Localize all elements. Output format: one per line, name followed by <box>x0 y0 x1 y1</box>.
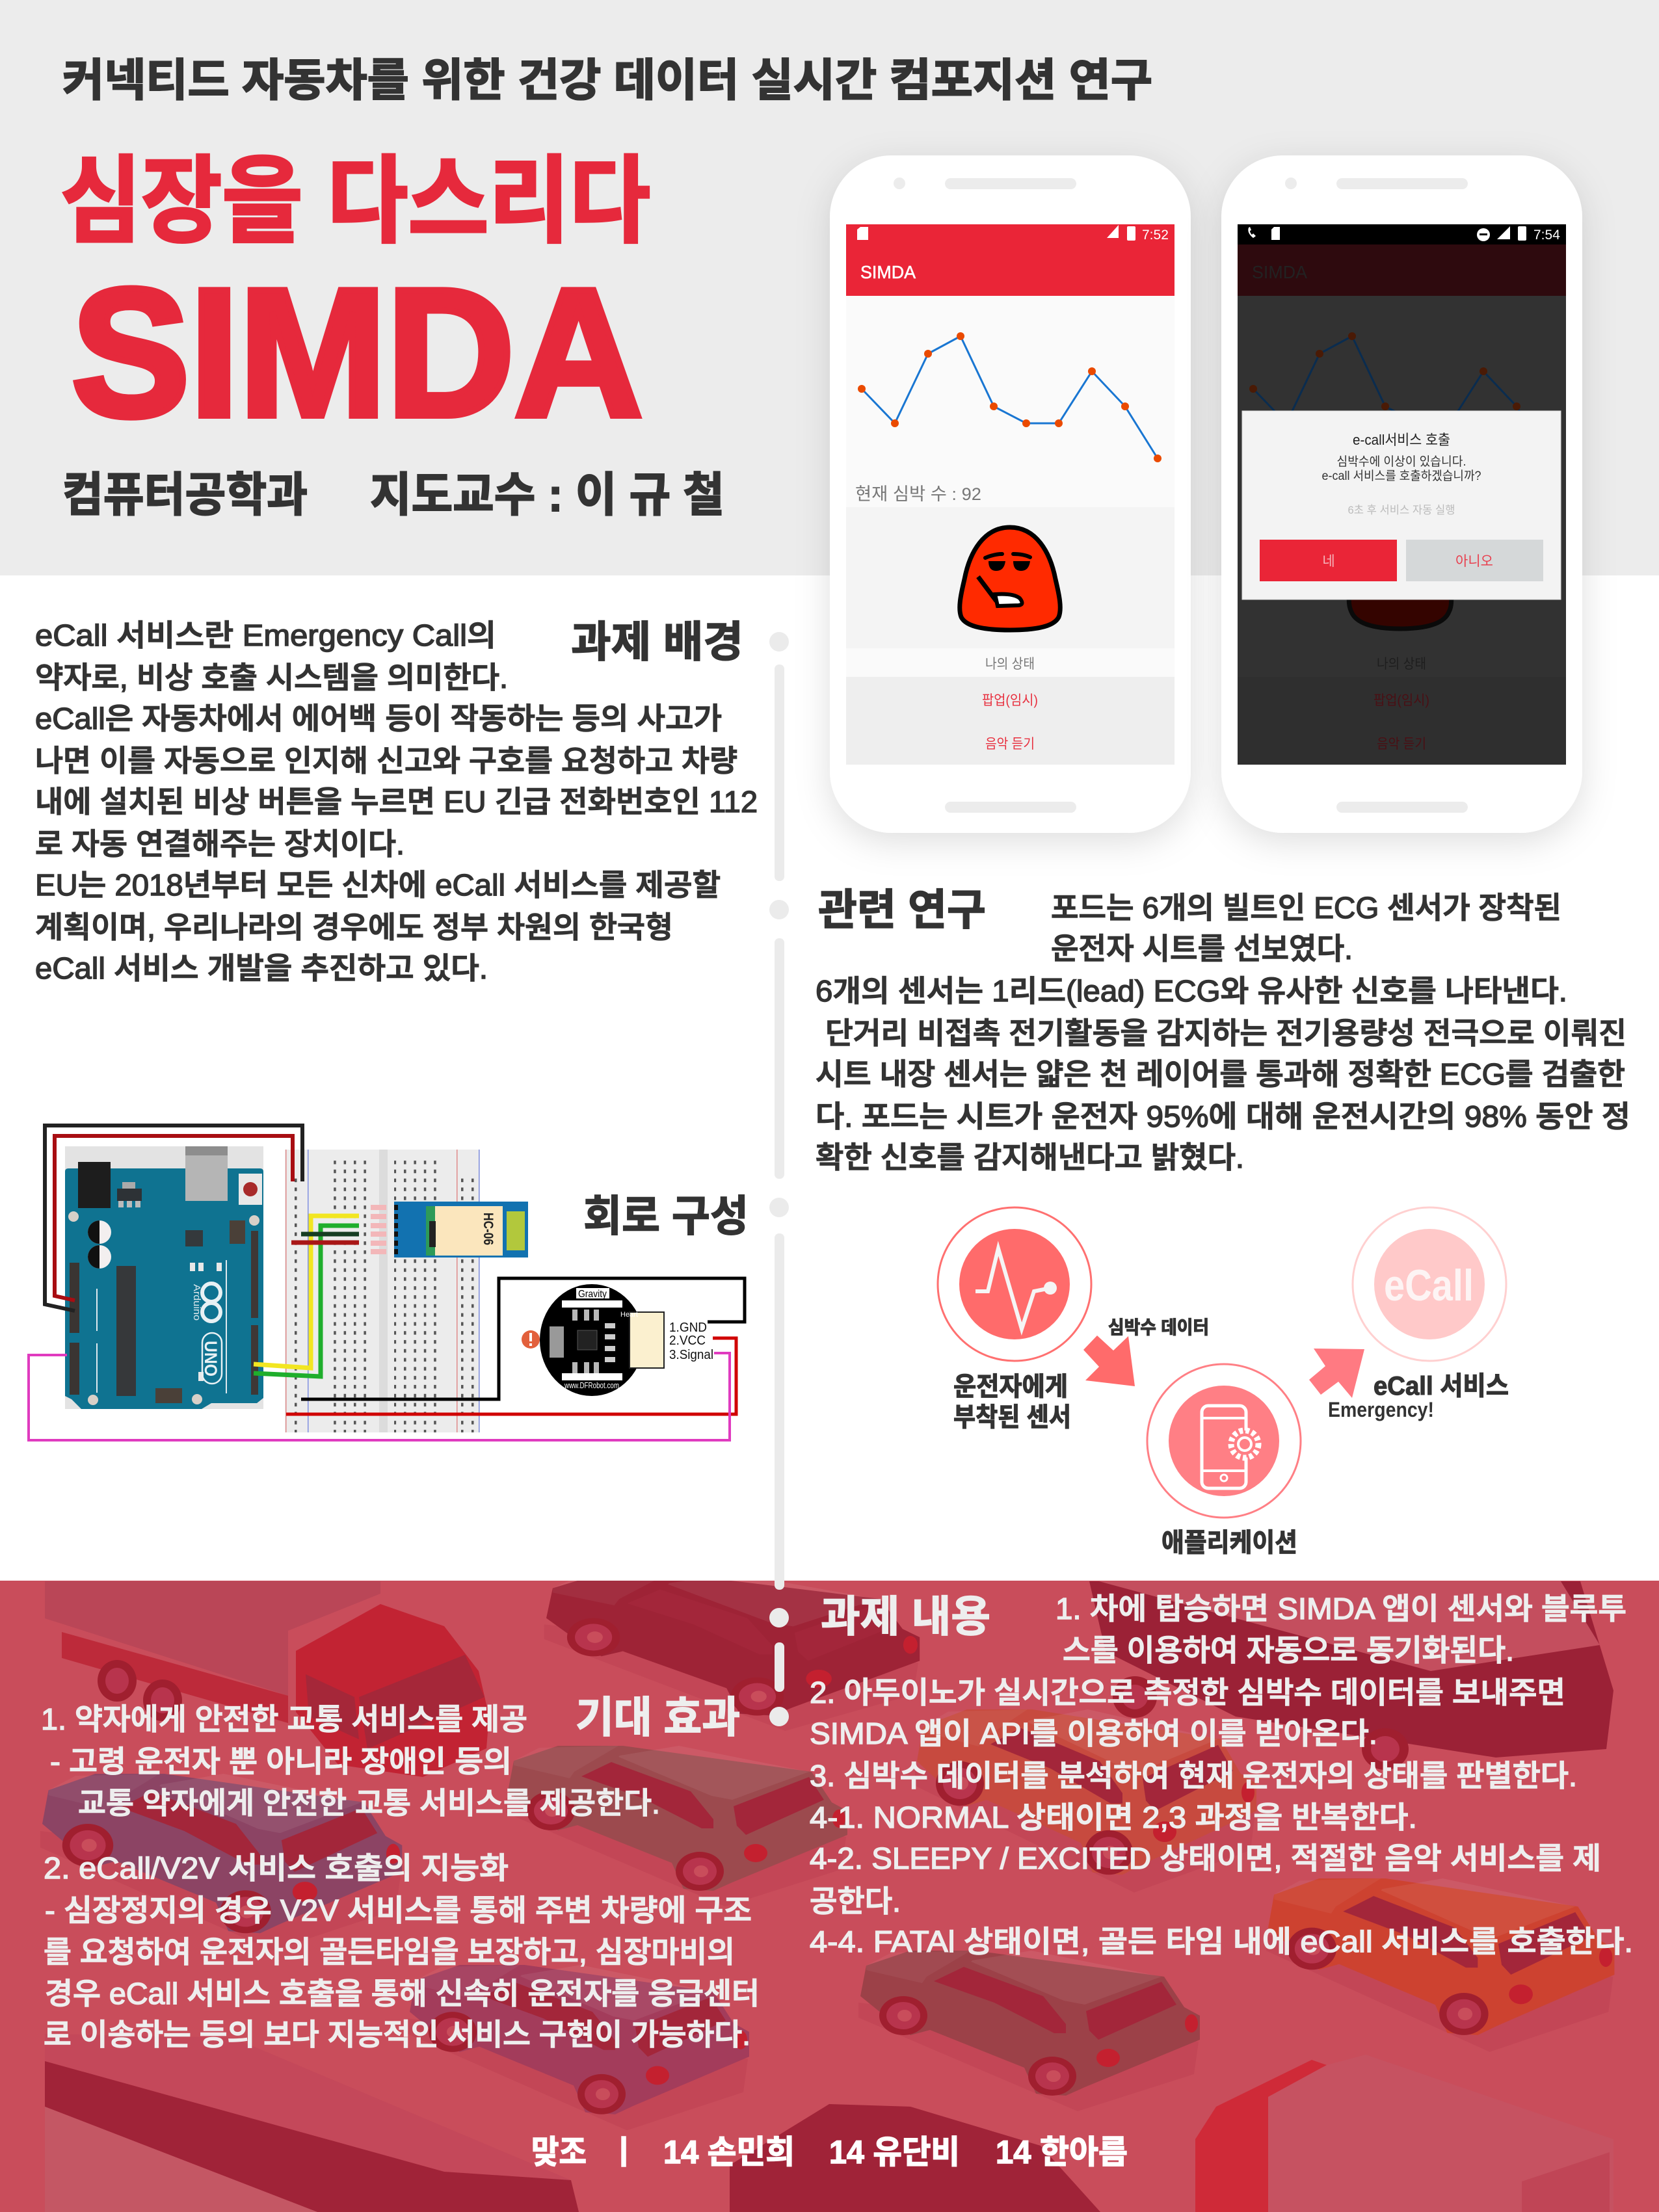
heading: 과제 내용 <box>821 1592 990 1640</box>
arduino: UNO <box>201 1341 220 1376</box>
HC-06 module <box>371 1202 528 1257</box>
dim labels: 나의 상태 <box>1377 657 1426 672</box>
list: 스를 이용하여 자동으로 동기화된다. <box>1063 1633 1514 1667</box>
application node <box>1147 1364 1301 1557</box>
header background <box>0 0 1659 575</box>
heart rate label: 현재 심박 수 : 92 <box>855 484 981 504</box>
dim labels <box>1374 657 1429 752</box>
dialog <box>1242 411 1561 599</box>
app bar <box>846 224 1175 296</box>
team footer <box>531 2134 1128 2170</box>
popup button: 팝업(임시) <box>982 693 1038 708</box>
paragraph: 단거리 비접촉 전기활동을 감지하는 전기용량성 전극으로 이뤄진 <box>825 1016 1626 1050</box>
main title SIMDA: SIMDA <box>72 252 643 454</box>
dim labels: 팝업(임시) <box>1374 693 1429 708</box>
department: 컴퓨터공학과 <box>62 469 308 521</box>
paragraph: 시트 내장 센서는 얇은 천 레이어를 통과해 정확한 ECG를 검출한 <box>816 1057 1625 1091</box>
list: 1. 약자에게 안전한 교통 서비스를 제공 <box>41 1702 527 1736</box>
heart sensor: www.DFRobot.com <box>564 1380 619 1390</box>
paragraph: 계획이며, 우리나라의 경우에도 정부 차원의 한국형 <box>35 910 673 944</box>
arrow: emergency <box>1309 1349 1364 1398</box>
eCall node <box>1353 1207 1509 1401</box>
pin labels: 1.GND <box>669 1321 707 1335</box>
dialog message: e-call 서비스를 호출하겠습니까? <box>1321 469 1481 483</box>
heart sensor <box>522 1284 713 1396</box>
application node: 애플리케이션 <box>1161 1529 1297 1557</box>
professor: 지도교수 : 이 규 철 <box>370 469 724 521</box>
list: SIMDA 앱이 API를 이용하여 이를 받아온다. <box>810 1717 1377 1750</box>
paragraph: 확한 신호를 감지해낸다고 밝혔다. <box>816 1140 1244 1174</box>
team footer: 14 한아름 <box>996 2134 1128 2170</box>
paragraph: 운전자 시트를 선보였다. <box>1051 932 1353 966</box>
screen body <box>846 296 1175 507</box>
list: 공한다. <box>810 1884 901 1918</box>
list: 2. eCall/V2V 서비스 호출의 지능화 <box>44 1851 509 1885</box>
dim labels: 음악 듣기 <box>1377 737 1426 752</box>
dim face <box>1349 585 1452 629</box>
section: related research <box>816 886 1630 1174</box>
list <box>41 1702 760 2051</box>
yes button <box>1260 540 1397 581</box>
subtitle: 커넥티드 자동차를 위한 건강 데이터 실시간 컴포지션 연구 <box>62 55 1152 105</box>
list: 2. 아두이노가 실시간으로 측정한 심박수 데이터를 보내주면 <box>810 1676 1565 1709</box>
heart sensor: Gravity <box>578 1289 607 1300</box>
arrow: data <box>1083 1336 1135 1386</box>
list: 4-4. FATAl 상태이면, 골든 타임 내에 eCall 서비스를 호출한다. <box>810 1925 1633 1958</box>
team footer: 14 유단비 <box>829 2134 960 2170</box>
phone 1 <box>830 155 1191 833</box>
arduino <box>65 1146 263 1409</box>
paragraph: EU는 2018년부터 모든 신차에 eCall 서비스를 제공할 <box>35 868 721 902</box>
paragraph: 6개의 센서는 1리드(lead) ECG와 유사한 신호를 나타낸다. <box>816 974 1567 1008</box>
header text block <box>60 55 1152 521</box>
music button: 음악 듣기 <box>985 737 1035 752</box>
dim title: SIMDA <box>1252 262 1307 282</box>
paragraph: eCall은 자동차에서 에어백 등이 작동하는 등의 사고가 <box>35 702 722 735</box>
data label: 심박수 데이터 <box>1108 1317 1209 1337</box>
list: 를 요청하여 운전자의 골든타임을 보장하고, 심장마비의 <box>44 1935 735 1969</box>
pin labels: 2.VCC <box>669 1334 706 1348</box>
phone 2 <box>1221 155 1582 833</box>
line chart <box>858 332 1161 462</box>
circuit diagram <box>29 1126 745 1440</box>
arduino: Arduino <box>191 1284 202 1321</box>
paragraph: 내에 설치된 비상 버튼을 누르면 EU 긴급 전화번호인 112 <box>35 785 758 819</box>
dialog message <box>1321 454 1481 483</box>
section: background <box>35 618 758 985</box>
eCall node: eCall <box>1384 1261 1474 1310</box>
paragraph <box>816 891 1630 1174</box>
sensor node: 운전자에게 <box>953 1373 1068 1401</box>
list: 교통 약자에게 안전한 교통 서비스를 제공한다. <box>78 1786 660 1820</box>
dialog: 아니오 <box>1455 554 1493 569</box>
sensor node: 부착된 센서 <box>953 1403 1071 1432</box>
pin labels: 3.Signal <box>669 1348 713 1362</box>
arduino logo <box>202 1284 220 1321</box>
eCall node: eCall 서비스 <box>1374 1372 1509 1401</box>
list: 로 이송하는 등의 보다 지능적인 서비스 구현이 가능하다. <box>44 2018 750 2051</box>
dialog title: e-call서비스 호출 <box>1353 432 1450 448</box>
face icon <box>960 527 1060 630</box>
dimmed screen <box>1238 244 1566 765</box>
list: - 심장정지의 경우 V2V 서비스를 통해 주변 차량에 구조 <box>45 1893 752 1927</box>
no button <box>1406 540 1543 581</box>
list: 4-2. SLEEPY / EXCITED 상태이면, 적절한 음악 서비스를 제 <box>810 1841 1601 1875</box>
phone body <box>1221 155 1582 833</box>
section: expected effect <box>41 1693 760 2051</box>
list: 경우 eCall 서비스 호출을 통해 신속히 운전자를 응급센터 <box>45 1977 760 2010</box>
list: 3. 심박수 데이터를 분석하여 현재 운전자의 상태를 판별한다. <box>810 1759 1577 1793</box>
countdown: 6초 후 서비스 자동 실행 <box>1347 504 1455 516</box>
phone body <box>830 155 1191 833</box>
sensor node <box>938 1207 1091 1432</box>
pin labels <box>669 1321 713 1362</box>
paragraph: eCall 서비스란 Emergency Call의 <box>35 618 496 652</box>
system flow diagram <box>938 1207 1509 1557</box>
dialog message: 심박수에 이상이 있습니다. <box>1337 454 1466 469</box>
breadboard <box>285 1150 481 1432</box>
list: - 고령 운전자 뿐 아니라 장애인 등의 <box>50 1745 512 1778</box>
paragraph: 다. 포드는 시트가 운전자 95%에 대해 운전시간의 98% 동안 정 <box>816 1099 1630 1133</box>
list: 4-1. NORMAL 상태이면 2,3 과정을 반복한다. <box>810 1800 1417 1834</box>
bottom band with car illustration <box>0 1573 1659 2212</box>
paragraph: 약자로, 비상 호출 시스템을 의미한다. <box>35 661 508 694</box>
paragraph: eCall 서비스 개발을 추진하고 있다. <box>35 951 488 985</box>
emergency label: Emergency! <box>1328 1398 1434 1421</box>
list: 1. 차에 탑승하면 SIMDA 앱이 센서와 블루투 <box>1055 1592 1626 1626</box>
team footer: 14 손민희 <box>663 2134 795 2170</box>
warning icon <box>522 1330 540 1349</box>
status bar <box>1238 224 1566 244</box>
state label: 나의 상태 <box>985 657 1035 672</box>
paragraph: 포드는 6개의 빌트인 ECG 센서가 장착된 <box>1051 891 1561 925</box>
dialog: 네 <box>1322 554 1335 569</box>
main title korean: 심장을 다스리다 <box>60 148 650 254</box>
heading: 과제 배경 <box>571 618 743 666</box>
clock: 7:54 <box>1533 228 1560 243</box>
heart sensor: Heart <box>620 1311 638 1319</box>
clock: 7:52 <box>1142 228 1169 243</box>
heading: 기대 효과 <box>576 1693 740 1741</box>
paragraph <box>35 618 758 985</box>
section: project content <box>810 1592 1633 1958</box>
dim chart <box>1249 332 1549 458</box>
heading: circuit: 회로 구성 <box>583 1192 749 1240</box>
HC-06 module: HC-06 <box>481 1213 496 1245</box>
app title: SIMDA <box>860 262 916 282</box>
team footer: 맞조 <box>531 2134 587 2170</box>
heading: 관련 연구 <box>818 886 986 934</box>
list <box>810 1592 1633 1958</box>
jumper wires <box>29 1126 745 1440</box>
paragraph: 로 자동 연결해주는 장치이다. <box>35 827 405 861</box>
paragraph: 나면 이를 자동으로 인지해 신고와 구호를 요청하고 차량 <box>35 744 737 778</box>
timeline <box>769 632 789 1726</box>
